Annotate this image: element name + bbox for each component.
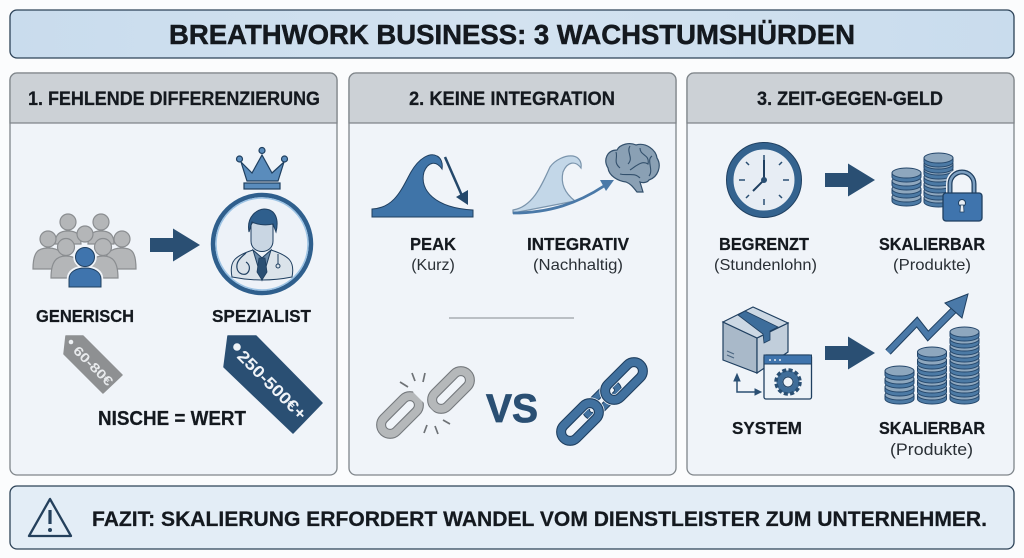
label: produkte top: (Produkte) bbox=[893, 257, 971, 274]
icon: peak wave bbox=[372, 155, 473, 217]
label: integrativ: INTEGRATIV bbox=[527, 234, 629, 254]
title bar: BREATHWORK BUSINESS: 3 WACHSTUMSHÜRDEN bbox=[169, 19, 855, 50]
icon: integrative wave with arrow to brain bbox=[513, 156, 614, 213]
icon: intact chain bbox=[557, 358, 647, 445]
title bar bbox=[10, 10, 1014, 58]
price tag: 60-80 euro bbox=[64, 336, 122, 393]
heading 1: 1. FEHLENDE DIFFERENZIERUNG bbox=[28, 88, 320, 110]
label: nische = wert: NISCHE = WERT bbox=[98, 408, 246, 430]
arrow: system to scalable bbox=[825, 336, 875, 370]
panel 3: zeit-gegen-geld bbox=[687, 73, 1014, 475]
label: system: SYSTEM bbox=[732, 418, 802, 438]
heading 2: 2. KEINE INTEGRATION bbox=[409, 88, 615, 110]
icon: specialist portrait bbox=[213, 195, 311, 293]
label: peak: PEAK bbox=[410, 234, 456, 254]
panel 1: fehlende Differenzierung bbox=[10, 73, 337, 475]
icon: coins and lock bbox=[892, 153, 982, 221]
label: stundenlohn: (Stundenlohn) bbox=[714, 257, 817, 274]
conclusion bar bbox=[10, 486, 1014, 549]
label: begrenzt: BEGRENZT bbox=[719, 234, 809, 254]
icon: box and software window bbox=[723, 307, 812, 399]
label: nachhaltig: (Nachhaltig) bbox=[533, 257, 623, 274]
icon: broken chain bbox=[377, 367, 474, 438]
icon: brain bbox=[606, 144, 659, 192]
label: spezialist: SPEZIALIST bbox=[212, 306, 311, 326]
conclusion text: FAZIT: SKALIERUNG ERFORDERT WANDEL VOM DIENSTLEISTER ZUM UNTERNEHMER. bbox=[92, 507, 987, 531]
vs label: VS bbox=[486, 387, 538, 431]
label: skalierbar top: SKALIERBAR bbox=[879, 234, 985, 254]
icon: crowd with highlighted person bbox=[33, 214, 136, 287]
label: skalierbar bottom: SKALIERBAR bbox=[879, 418, 985, 438]
icon: clock bbox=[726, 142, 802, 218]
icon: warning triangle bbox=[29, 499, 71, 536]
icon: crown bbox=[236, 148, 288, 189]
panel 2: keine Integration bbox=[349, 73, 676, 475]
icon: rising coin stacks with trend arrow bbox=[885, 294, 979, 404]
label: generisch: GENERISCH bbox=[36, 306, 134, 326]
price tag: 250-500 euro: 250-500€+ bbox=[233, 347, 310, 424]
heading 3: 3. ZEIT-GEGEN-GELD bbox=[757, 88, 943, 110]
label: produkte bottom: (Produkte) bbox=[890, 441, 973, 459]
price tag: 60-80 euro: 60-80€ bbox=[70, 343, 116, 389]
label: kurz: (Kurz) bbox=[411, 257, 455, 274]
arrow: generic to specialist bbox=[150, 228, 200, 262]
price tag: 250-500 euro bbox=[224, 336, 322, 433]
arrow: limited to scalable bbox=[825, 164, 875, 196]
